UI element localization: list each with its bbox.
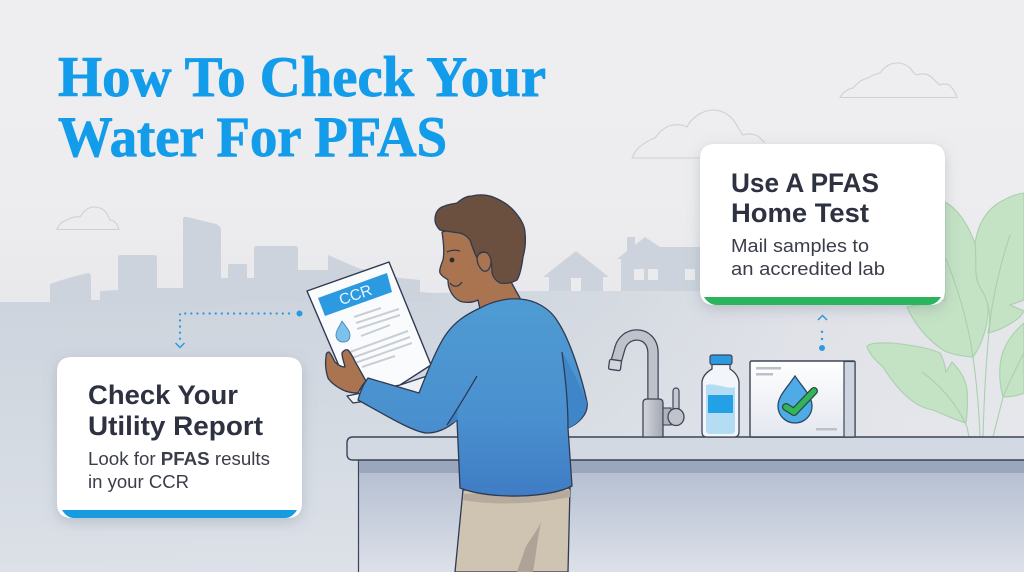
report drop: [336, 321, 350, 342]
house window: [571, 278, 581, 293]
ground band: [0, 291, 1024, 572]
cloud: top right: [840, 63, 957, 98]
pants: [455, 488, 570, 572]
card body: in your CCR: [88, 472, 189, 492]
sweater: [358, 299, 587, 496]
bottle cap: [710, 355, 732, 364]
cloud: centre: [632, 110, 765, 158]
bottle label: [708, 395, 733, 413]
hair: [435, 195, 525, 283]
card accent: green: [704, 297, 941, 305]
plant stems and veins: [922, 235, 1024, 437]
faucet: [608, 335, 684, 437]
faucet connector: [663, 408, 671, 425]
leaf: top right: [975, 193, 1024, 333]
house windows: [634, 269, 695, 280]
card accent: blue: [62, 510, 297, 518]
cabinet: [358, 460, 1024, 572]
card body: [88, 449, 270, 492]
ccr report: [307, 262, 431, 392]
house silhouette: large: [617, 237, 702, 294]
counter top: [347, 437, 1024, 460]
faucet base: [643, 399, 663, 437]
card body: Mail samples to: [731, 236, 869, 256]
smile: [450, 282, 462, 286]
title: [58, 46, 546, 169]
city skyline: [0, 217, 433, 302]
cabinet shadow: [359, 461, 1024, 473]
report header label: CCR: [337, 282, 374, 309]
cloud: left: [57, 207, 119, 230]
face and neck: [440, 225, 521, 309]
water bottle: [702, 355, 739, 437]
sweater arm shadow: [448, 376, 477, 424]
report lines: [350, 308, 412, 367]
box label lines: [756, 367, 837, 430]
card heading: Home Test: [731, 198, 869, 228]
card heading: Check Your: [88, 380, 238, 410]
card body: [731, 236, 885, 279]
card body: Look for PFAS results: [88, 449, 270, 469]
arrow: box to home test card: [818, 316, 827, 351]
faucet handle rod: [673, 388, 679, 412]
waistband shadow: [463, 490, 570, 503]
card heading: [731, 168, 879, 228]
pants fold: [517, 522, 541, 572]
back sheet: [347, 376, 427, 403]
person: [307, 195, 587, 572]
arrow: report to utility card: [176, 310, 302, 348]
house silhouette: [543, 251, 609, 294]
box side panel: [844, 362, 855, 437]
sweater fold line: [562, 352, 568, 428]
card heading: Utility Report: [88, 411, 263, 441]
faucet tip: [608, 359, 622, 371]
title: How To Check Your: [58, 46, 546, 109]
sweater side fold: [562, 352, 587, 428]
icon: water drop with check: [778, 376, 814, 423]
card body: an accredited lab: [731, 259, 885, 279]
eyebrow: [447, 250, 460, 252]
report header: [318, 273, 392, 316]
hand: [326, 350, 366, 393]
ear: [477, 252, 491, 271]
test kit box: [750, 361, 855, 437]
card: use a pfas home test: [700, 144, 945, 305]
counter: [347, 437, 1024, 572]
leaf: upper left: [907, 202, 988, 357]
card heading: Use A PFAS: [731, 168, 879, 198]
eye: [450, 258, 454, 262]
leaf: far right: [1000, 323, 1024, 397]
card heading: [88, 380, 263, 441]
bottle water: [706, 384, 735, 434]
leaf: lower left: [867, 343, 967, 423]
plant: [867, 193, 1024, 437]
faucet handle knob: [668, 408, 684, 426]
title: Water For PFAS: [58, 106, 447, 169]
card: check your utility report: [57, 357, 302, 518]
